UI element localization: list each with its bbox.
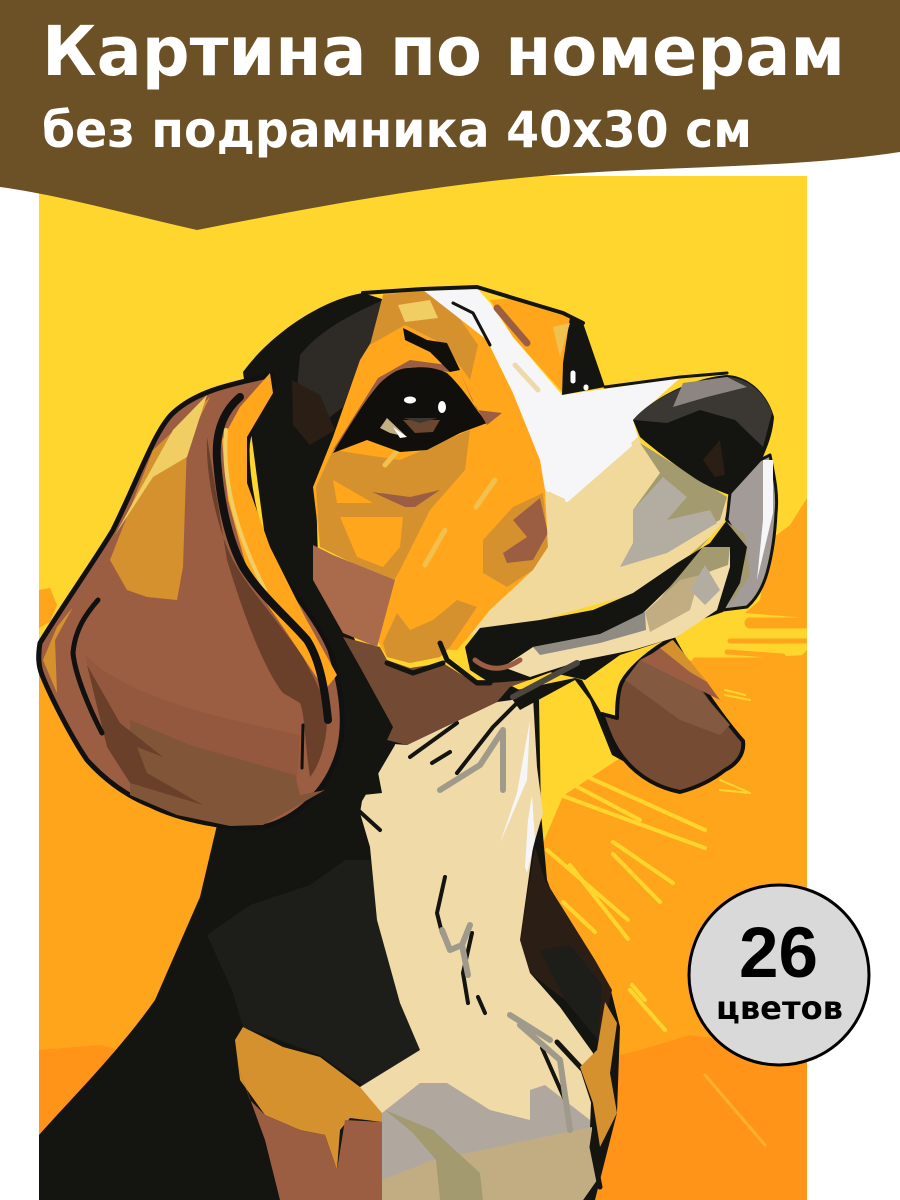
painting background	[39, 176, 807, 1200]
badge number: 26	[739, 914, 818, 993]
mouth black	[465, 495, 747, 683]
eye corner brown	[460, 372, 502, 425]
cheek light brown	[313, 545, 395, 647]
cheek wrinkle	[372, 490, 440, 507]
far eye glints	[573, 373, 586, 388]
eye glints	[380, 418, 407, 437]
badge circle	[689, 885, 869, 1065]
nose	[633, 375, 774, 495]
far brow stripe	[497, 308, 527, 343]
lip white edge	[757, 460, 773, 580]
blaze black line	[453, 303, 490, 345]
ear tan area	[110, 397, 210, 600]
eye socket	[333, 367, 487, 453]
sun ray streaks	[547, 623, 820, 1145]
ear left black line	[73, 600, 102, 733]
far brow orange	[490, 298, 573, 392]
ear fold line	[217, 397, 328, 720]
dog	[39, 287, 777, 1200]
lip tan lower	[727, 522, 750, 605]
throat grey stripe	[513, 663, 577, 697]
far brow light	[553, 323, 570, 357]
ear lower band	[85, 655, 300, 780]
nostril brown	[703, 440, 725, 477]
right shoulder tan	[580, 1002, 617, 1147]
ear	[39, 373, 342, 828]
white neck strips	[500, 720, 535, 873]
eye rim	[333, 360, 450, 450]
cheek light strokes	[385, 450, 495, 565]
tongue shape	[602, 638, 743, 792]
lighter neck patch	[540, 945, 602, 1040]
head outline	[363, 287, 583, 323]
chest tan lower	[377, 1127, 597, 1200]
face orange	[313, 290, 548, 663]
brown fur patch	[292, 380, 335, 445]
right lip white	[723, 455, 777, 610]
muzzle lower shade	[540, 537, 710, 622]
header ribbon	[0, 0, 900, 230]
tongue	[602, 638, 743, 792]
upper glint	[404, 396, 416, 404]
main eye	[333, 328, 502, 453]
lip grey right	[690, 565, 720, 605]
under-eye shade	[316, 430, 470, 583]
muzzle olive shade	[633, 443, 727, 547]
lighter black patch	[207, 860, 420, 1087]
far eye patch	[562, 317, 605, 395]
forehead light patch	[398, 300, 438, 322]
white blaze	[423, 288, 680, 500]
left brown patch	[235, 1058, 382, 1200]
ear light inner strip	[225, 430, 265, 590]
far eye	[553, 317, 605, 395]
jaw brown	[343, 637, 540, 745]
lip tan	[645, 575, 700, 632]
muzzle	[470, 437, 727, 635]
iris	[403, 420, 440, 433]
chest grey shading	[382, 1083, 590, 1180]
lower glint	[393, 427, 407, 438]
ear shape	[39, 375, 342, 828]
cheek bright patches	[333, 480, 403, 567]
subtitle: без подрамника 40х30 см	[42, 101, 752, 159]
iris grey	[403, 418, 438, 423]
ear orange rim	[222, 373, 337, 690]
mouth corner	[475, 660, 520, 668]
black fur highlight	[295, 300, 383, 425]
muzzle grey shade	[620, 477, 717, 567]
lip grey	[533, 612, 646, 655]
ear inner shadow	[207, 437, 327, 777]
brow black	[403, 328, 460, 372]
nose dark	[633, 375, 774, 495]
forehead shade	[370, 290, 478, 380]
throat black	[507, 638, 680, 792]
head black	[243, 293, 395, 830]
nose highlight	[673, 377, 747, 407]
left tan patch	[235, 1027, 382, 1170]
colour count badge	[689, 885, 869, 1065]
chest fur grey marks	[440, 730, 570, 1130]
ear crease	[87, 665, 203, 805]
nose upper grey	[633, 377, 772, 447]
bridge outline	[605, 373, 727, 387]
tongue tip tan	[660, 640, 707, 682]
ear small line	[302, 725, 303, 768]
lip olive	[650, 547, 730, 610]
chest strokes	[358, 700, 600, 1187]
right glint	[438, 401, 446, 413]
lower lip	[503, 547, 730, 677]
ear light rim	[115, 395, 207, 535]
lower jaw shade	[383, 600, 477, 663]
title: Картина по номерам	[42, 12, 845, 92]
chest cream	[360, 697, 597, 1200]
ear left rim tan	[43, 607, 73, 693]
chest olive shade	[385, 1110, 483, 1200]
blaze tan stroke	[515, 365, 538, 390]
muzzle brown spot	[503, 498, 548, 563]
dark neck shading	[520, 847, 612, 1040]
badge label: цветов	[716, 989, 843, 1027]
tongue highlight	[640, 640, 720, 700]
tongue mid tone	[625, 660, 730, 735]
dog body	[39, 680, 620, 1200]
jaw line	[387, 643, 490, 683]
muzzle orange shade	[483, 493, 548, 587]
muzzle white streak	[548, 445, 630, 500]
ear bottom band	[130, 720, 325, 826]
